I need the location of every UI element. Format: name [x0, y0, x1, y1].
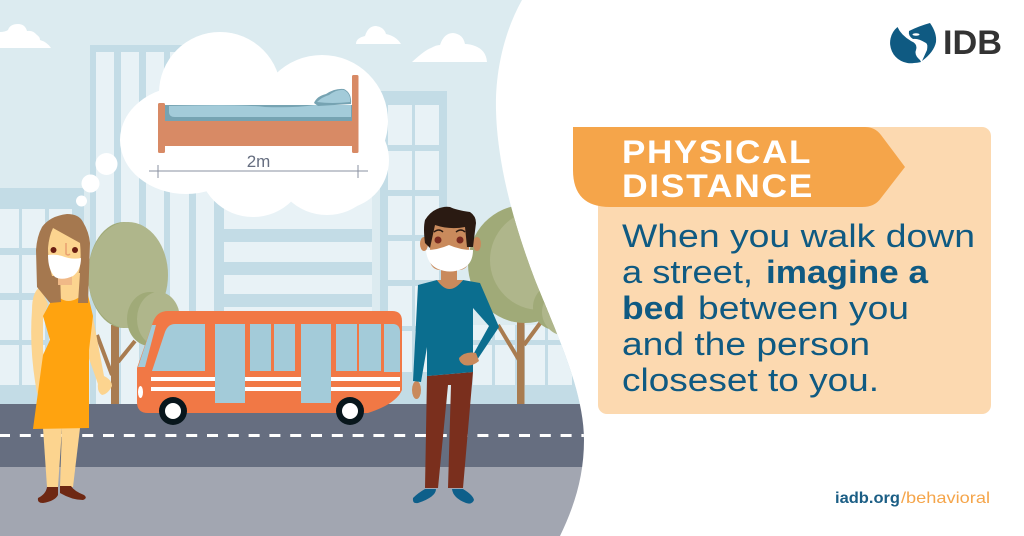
center building [221, 198, 372, 311]
thought bubble medium [82, 174, 100, 192]
IDB logo [890, 23, 1002, 63]
website link: /behavioral [901, 490, 990, 507]
body text: bed [622, 290, 685, 326]
panel background [598, 127, 991, 414]
thought bubble small [76, 196, 87, 206]
globe ocean right [909, 23, 936, 61]
body text: When you walk down [622, 218, 975, 254]
bed [158, 75, 358, 153]
IDB wordmark: IDB [943, 24, 1002, 62]
website link: iadb.org [835, 490, 900, 507]
thought cloud [76, 32, 389, 217]
man [412, 207, 499, 504]
street scene [0, 0, 600, 536]
body text: imagine a [766, 254, 928, 290]
right building [380, 91, 447, 404]
body text: closeset to you. [622, 362, 879, 398]
heading: PHYSICAL [622, 134, 812, 170]
woman [31, 214, 112, 503]
sky clouds [0, 24, 487, 62]
far right building [470, 325, 580, 404]
road dashes [0, 434, 600, 437]
road [0, 404, 600, 467]
2m measurement: 2m [247, 152, 270, 171]
2m measurement [149, 152, 368, 178]
left tree [88, 222, 180, 404]
thought bubble large [96, 153, 118, 175]
body text: a street, [622, 254, 753, 290]
body text: between you [698, 290, 909, 326]
heading: DISTANCE [622, 168, 814, 204]
sky [0, 0, 600, 404]
text panel [573, 127, 991, 414]
island highlight [912, 33, 920, 36]
body text: and the person [622, 326, 870, 362]
globe ocean left [890, 27, 921, 63]
heading banner [573, 127, 905, 207]
bus [137, 311, 402, 425]
tall building [90, 45, 221, 404]
sidewalk [0, 467, 600, 536]
body text [622, 218, 975, 398]
right tree [468, 206, 558, 404]
left building [0, 188, 84, 404]
